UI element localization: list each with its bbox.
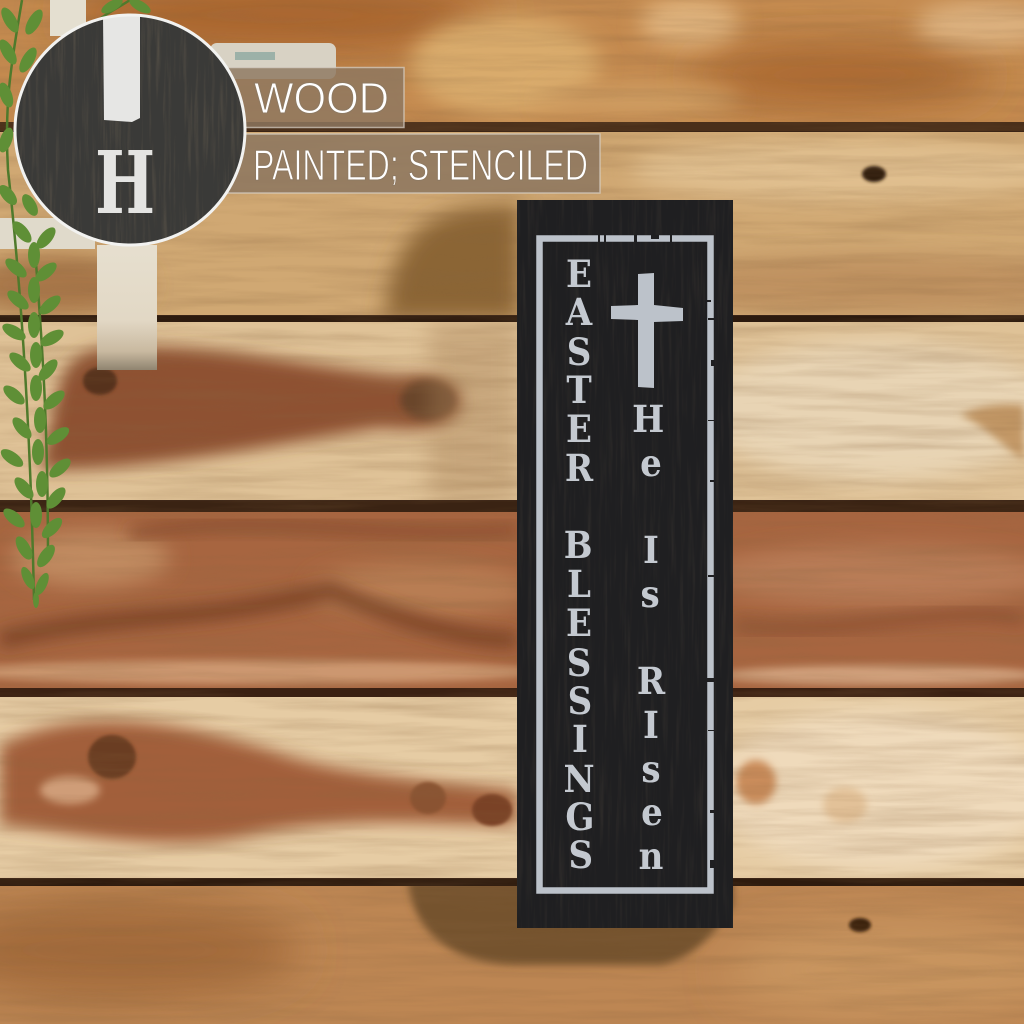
plank 6 (0, 880, 1024, 1024)
plank 4 (0, 512, 1024, 688)
plank 1 (0, 0, 1024, 122)
label: WOOD (228, 68, 404, 128)
plank 3 (0, 322, 1024, 500)
label: WOOD: WOOD (254, 74, 389, 123)
text: EASTER BLESSINGS (563, 254, 595, 877)
text: EASTER BLESSINGS: E (566, 409, 592, 451)
text: He Is Risen (632, 399, 666, 878)
text: EASTER BLESSINGS: A (565, 292, 593, 334)
detail magnifier circle (15, 15, 245, 245)
sign board (517, 200, 733, 928)
plank gap shadows (0, 122, 1024, 131)
text: He Is Risen: n (639, 836, 664, 878)
text: He Is Risen: I (643, 530, 659, 572)
white painted stripe (103, 15, 140, 122)
label: PAINTED; STENCILED: PAINTED; STENCILED (253, 141, 588, 190)
text: EASTER BLESSINGS: S (568, 681, 592, 723)
text: EASTER BLESSINGS: E (566, 254, 592, 296)
text: He Is Risen: s (640, 574, 660, 616)
text: EASTER BLESSINGS: L (567, 564, 591, 606)
white painted frame behind plant (0, 0, 336, 370)
cross (611, 273, 683, 388)
text: EASTER BLESSINGS: S (569, 835, 593, 877)
text: EASTER BLESSINGS: S (567, 643, 591, 685)
text: EASTER BLESSINGS: T (566, 370, 592, 412)
text: EASTER BLESSINGS: R (565, 448, 594, 490)
stenciled H letter: H (95, 132, 155, 233)
text: EASTER BLESSINGS: S (567, 332, 591, 374)
text: He Is Risen: R (637, 661, 666, 703)
plank 5 (0, 697, 1024, 878)
text: He Is Risen: e (641, 792, 663, 834)
label: PAINTED; STENCILED (228, 134, 600, 193)
text: EASTER BLESSINGS: I (572, 719, 588, 761)
hanging plant vines (0, 0, 153, 608)
text: He Is Risen: H (632, 399, 664, 441)
text: He Is Risen: I (643, 705, 659, 747)
plank 2 (0, 132, 1024, 320)
text: EASTER BLESSINGS: B (564, 525, 592, 567)
text: EASTER BLESSINGS: G (565, 797, 594, 839)
stenciled border (540, 235, 715, 890)
text: EASTER BLESSINGS: E (566, 603, 592, 645)
text: He Is Risen: e (640, 443, 662, 485)
text: EASTER BLESSINGS: N (563, 759, 595, 801)
text: He Is Risen: s (641, 749, 661, 791)
black Easter sign (517, 200, 733, 928)
